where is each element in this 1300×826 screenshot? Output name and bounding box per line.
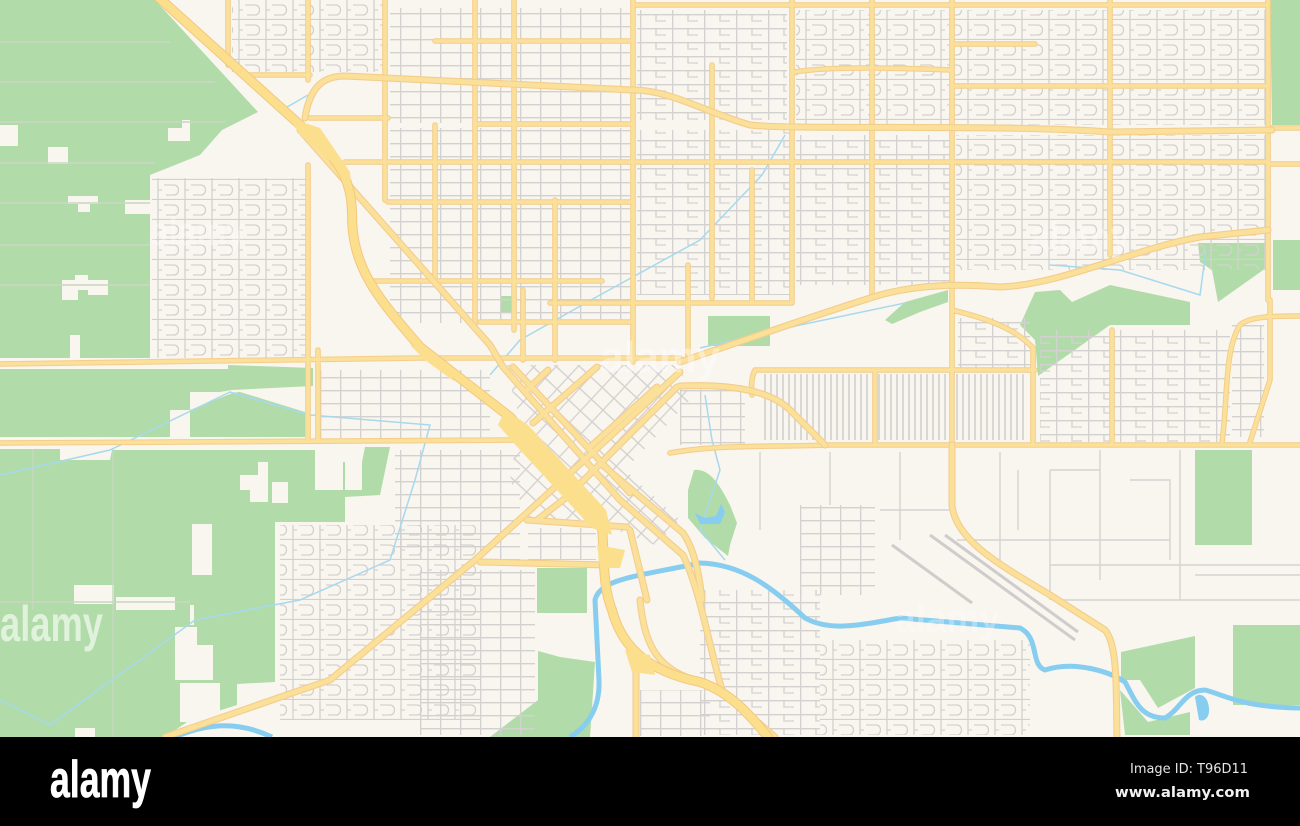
runways: [892, 535, 1078, 640]
park: river south east: [1121, 636, 1195, 708]
park: east block: [1198, 243, 1266, 302]
freeway casing: [157, 0, 768, 737]
streets: north east lower: [796, 135, 951, 285]
streets: north west: [232, 0, 387, 72]
park: western farmland middle: [0, 365, 313, 437]
streets: below freeway interchange: [528, 528, 596, 560]
watermark: east: alamy: [1030, 215, 1131, 259]
streets: striped blocks: [760, 374, 1025, 440]
faint watermark marks: [0, 210, 1131, 652]
streets: blocks south of ring: [958, 318, 1030, 368]
streets: downtown diagonal grid: [505, 365, 690, 545]
park: north east strip: [1270, 0, 1300, 125]
streets: mid south: [800, 505, 875, 595]
streets: south centre 2: [640, 690, 710, 736]
watermark: west: alamy: [150, 210, 246, 254]
arterial roads casing: [0, 0, 1300, 453]
streets: south river east: [820, 640, 1030, 735]
park: small lot: [350, 562, 384, 584]
streets: north east centre: [637, 10, 787, 120]
river: main: [570, 563, 1300, 737]
park: river corridor: [1020, 285, 1190, 376]
park: south square: [537, 568, 587, 613]
image id: Image ID: T96D11: [1130, 761, 1248, 777]
streets: south west centre: [395, 450, 520, 560]
streets: south river neighbourhood: [700, 590, 820, 735]
park: linear park: [885, 290, 948, 324]
lakes: [695, 504, 1209, 720]
website: www.alamy.com: [1115, 785, 1250, 801]
major roads fill: [165, 76, 1272, 737]
park: western farmland south: [0, 447, 390, 737]
park: lower east rectangle: [1195, 450, 1252, 545]
park: city lake park: [688, 470, 737, 556]
streets: east residential: [956, 135, 1266, 270]
park: south wedge: [490, 651, 595, 737]
streets: west residential: [152, 178, 307, 358]
park: tiny lot: [500, 296, 512, 312]
freeway interchanges: [290, 118, 655, 675]
major roads casing: [165, 76, 1272, 737]
streets: south centre: [420, 570, 535, 735]
streets: central north: [390, 128, 630, 323]
footer band: [0, 737, 1300, 826]
streets: east of downtown: [680, 385, 745, 445]
park: central square: [708, 316, 770, 346]
river: south west: [175, 726, 272, 737]
major curved and diagonal roads: [165, 76, 1272, 737]
watermark: centre: alamy: [600, 333, 721, 382]
arterial roads fill: [0, 0, 1300, 453]
park: south east lower: [1120, 690, 1190, 735]
streets: north east: [796, 10, 1266, 125]
streets: west centre: [320, 370, 490, 438]
thin streams: [0, 95, 1206, 725]
streets: south west residential: [280, 525, 480, 720]
watermark: left: alamy: [0, 596, 103, 652]
clearings in the green farmland: [0, 120, 390, 737]
park: east block right: [1273, 240, 1300, 290]
streets: industrial east: [760, 450, 1300, 600]
streets: middle centre: [637, 130, 792, 295]
streets: north centre: [390, 8, 630, 123]
footer logo: alamy: [50, 751, 151, 809]
freeway fill: [157, 0, 768, 737]
field boundary lines: [0, 42, 225, 737]
minor street network: [152, 0, 1300, 736]
streets: east of river: [1040, 330, 1230, 442]
streets: far east column: [1232, 325, 1264, 437]
park: western farmland north: [0, 0, 258, 358]
watermark: south east: alamy: [895, 597, 1001, 641]
park: far south east: [1233, 625, 1300, 705]
freeway: [157, 0, 768, 737]
